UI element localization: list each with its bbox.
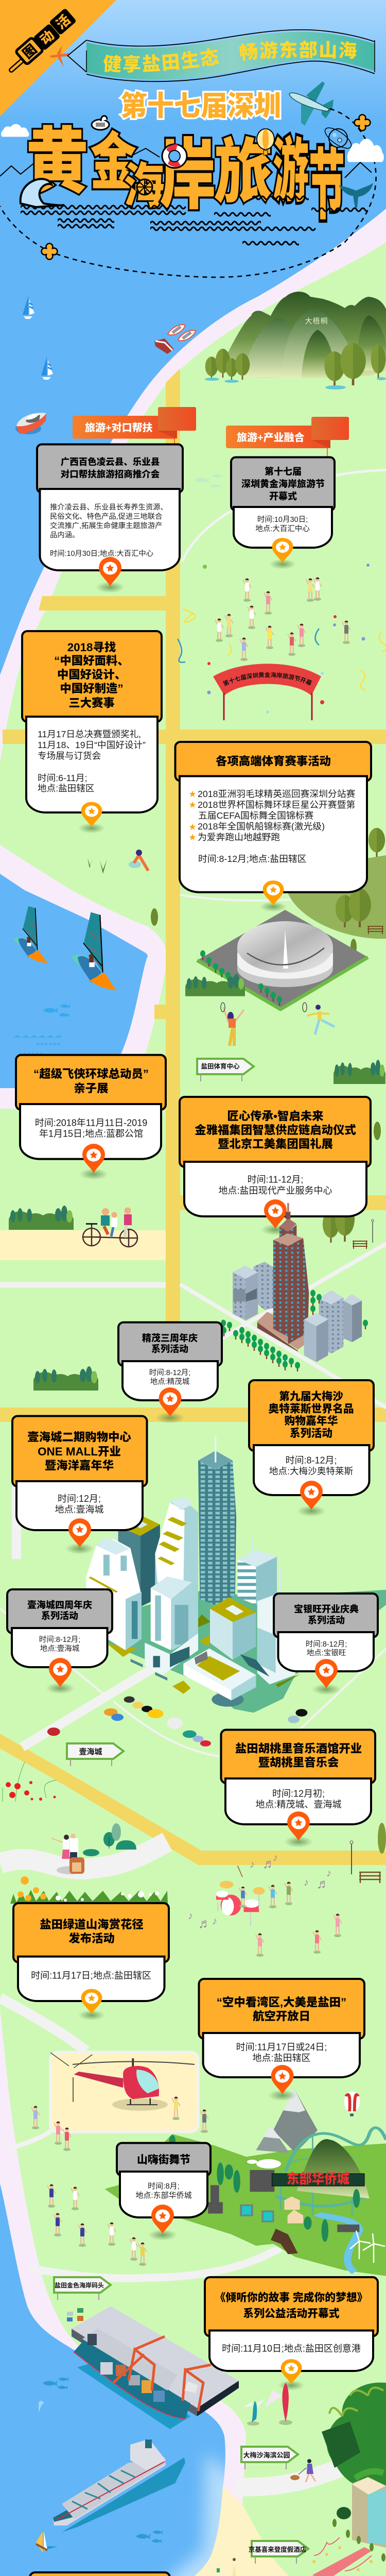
- card: 各项高端体育赛事活动: 时间:8-12月;地点:盐田辖区: [198, 854, 306, 864]
- statues: [243, 2383, 292, 2426]
- card: 2018寻找: 专场展与订货会: [38, 751, 101, 761]
- decorative mountains: [0, 148, 372, 178]
- grass strip with flowers: [10, 1876, 168, 1904]
- city ground shadow: [106, 1590, 386, 1713]
- card: 壹海城二期: 壹海城二期购物中心: [27, 1430, 131, 1444]
- hotel: [0, 2239, 386, 2548]
- card: 超级飞侠: 年1月15日;地点:蓝郡公馆: [39, 1128, 143, 1139]
- sign: 盐田体育中心: 盐田体育中心: [201, 1062, 240, 1070]
- card: 2018寻找: 2018寻找: [67, 641, 116, 654]
- illustration: title stamp: 动: [37, 27, 57, 48]
- card: 2018寻找: 地点:盐田辖区: [38, 783, 94, 793]
- fish shadow: [195, 474, 222, 488]
- sea ripples: [13, 1035, 63, 1055]
- confetti crowd: [215, 577, 350, 661]
- music notes: ♪: [212, 1916, 217, 1927]
- statue over pin: [283, 2383, 289, 2421]
- sign: 盐田体育中心: [197, 1059, 254, 1081]
- icon: teal airplane: [289, 81, 334, 126]
- sign: 盐田金色海岸码头: 盐田金色海岸码头: [55, 2281, 104, 2289]
- windsurfer left: [13, 906, 48, 963]
- illustration: mountains 大梧桐: 大梧桐: [305, 317, 328, 325]
- trees and bench by tower: [323, 1202, 374, 1249]
- card: 金色游船: [30, 2572, 170, 2576]
- music notes: ♪: [188, 1910, 193, 1922]
- illustration: theme park 东部华侨城: [104, 2089, 386, 2276]
- opening ceremony arch: 第十七届深圳黄金海岸旅游节开幕式: [223, 672, 312, 686]
- badminton man: [303, 1003, 335, 1035]
- card: 广西百色: [37, 444, 183, 593]
- music notes: [188, 1852, 331, 1931]
- card: 盐田绿道: 发布活动: [68, 1931, 115, 1945]
- card: 壹海城二期: 暨海洋嘉年华: [45, 1459, 114, 1472]
- card: 第九届大梅沙: 购物嘉年华: [285, 1415, 338, 1427]
- road vans: [130, 1659, 143, 1667]
- card: 各项高端体育赛事活动: 各项高端体育赛事活动: [216, 754, 331, 768]
- white paths: [0, 470, 386, 2487]
- grass tufts: [87, 858, 107, 874]
- bushes left: [9, 1206, 74, 1230]
- icon: ship wheel: [137, 179, 152, 195]
- card: 倾听你的故事: 时间:11月10日;地点:盐田区创意港: [222, 2343, 361, 2353]
- card: 第十七届开幕式: 深圳黄金海岸旅游节: [241, 478, 325, 489]
- music notes: ♪: [250, 1859, 255, 1870]
- icon: lamp: [350, 1841, 353, 1874]
- card: 倾听你的故事: 系列公益活动开幕式: [243, 2307, 340, 2319]
- bench and tree music area: [359, 1823, 386, 1883]
- trees on hill: [336, 828, 385, 927]
- illustration: title stamp: 活: [53, 12, 73, 32]
- illustration: stadium: [197, 910, 368, 1009]
- mid-rise: [210, 1608, 233, 1660]
- card: 壹海城四周年庆: [7, 1589, 112, 1694]
- palms: [322, 2382, 386, 2488]
- teal spiral tower: [198, 1461, 216, 1605]
- bushes lower: [33, 1366, 98, 1391]
- boats: [154, 325, 196, 354]
- card: 2018寻找: 三大赛事: [68, 696, 115, 709]
- card: 2018寻找: “中国好面料、: [54, 654, 129, 667]
- jellyfish: [39, 2401, 44, 2413]
- fish: [43, 1005, 71, 1017]
- card: 2018寻找: [22, 631, 162, 834]
- cloud right: [347, 139, 384, 162]
- card: 第十七届开幕式: 第十七届: [265, 466, 302, 477]
- family bike: [83, 1208, 137, 1247]
- card: 宝银旺开业庆典: 地点:宝银旺: [307, 1649, 346, 1657]
- card: 第十七届开幕式: 开幕式: [269, 490, 297, 502]
- music notes: ♪: [304, 1877, 309, 1888]
- confetti: [178, 564, 386, 714]
- card: 第九届大梅沙: 奥特莱斯世界名品: [268, 1402, 354, 1415]
- card: 2018寻找: 中国好制造”: [60, 682, 124, 695]
- illustration: office towers: [233, 1203, 362, 1362]
- tag: 旅游+产业融合: 旅游+产业融合: [237, 431, 305, 444]
- card: 匠心传承: 金雅福集团智慧供应链启动仪式: [195, 1123, 356, 1137]
- card: 各项高端体育赛事活动: ★: [189, 833, 196, 841]
- card: 匠心传承: 地点:盐田现代产业服务中心: [218, 1185, 332, 1196]
- helipad: [50, 2052, 198, 2132]
- grass plants: [151, 908, 381, 1140]
- heading: 黄金海岸旅游节: 黄: [26, 122, 89, 202]
- card: 2018寻找: 11月17日总决赛暨颁奖礼,: [38, 729, 141, 739]
- park trees cluster: [83, 1823, 136, 1856]
- card: 超级飞侠: 亲子展: [74, 1082, 109, 1095]
- tag: 旅游+对口帮扶: [73, 407, 196, 444]
- card: 倾听你的故事: [205, 2277, 378, 2391]
- card: 超级飞侠: [16, 1055, 166, 1180]
- card: 胡桃里音乐酒馆: 暨胡桃里音乐会: [258, 1756, 339, 1769]
- card: 广西百色: 民俗文化、特色产品,促进三地联合: [50, 512, 162, 521]
- flowers: [205, 377, 386, 389]
- sign: 壹海城: 壹海城: [79, 1747, 102, 1756]
- card: 壹海城四周年庆: 时间:8-12月;: [39, 1635, 80, 1644]
- card: 2018寻找: 时间:6-11月;: [38, 773, 87, 783]
- card: 宝银旺开业庆典: 系列活动: [308, 1615, 345, 1625]
- card: 山嗨街舞节: 山嗨街舞节: [137, 2154, 190, 2166]
- tag: 旅游+对口帮扶: 旅游+对口帮扶: [85, 421, 153, 434]
- sailboats: [23, 296, 53, 380]
- card: 2018寻找: 中国好设计、: [57, 668, 126, 681]
- fish near port: [43, 2377, 163, 2543]
- trees near mountain: [205, 343, 385, 386]
- sign: 盐田金色海岸码头: [54, 2277, 111, 2300]
- opening ceremony arch: [213, 664, 321, 720]
- top banner: [67, 29, 375, 82]
- grey right towers: [319, 1299, 331, 1353]
- card: 各项高端体育赛事活动: [175, 742, 371, 912]
- music notes: ♪: [273, 1852, 278, 1863]
- card: 空中看湾区 航空开放日: 时间:11月17日或24日;: [236, 2042, 327, 2053]
- black wave lines: [21, 196, 386, 245]
- card: 广西百色: 对口帮扶旅游招商推介会: [61, 469, 160, 479]
- card: 各项高端体育赛事活动: 为爱奔跑山地越野跑: [198, 832, 280, 842]
- card: 2018寻找: 11月18、19日“中国好设计”: [38, 740, 146, 750]
- tower shaft: [273, 1240, 288, 1336]
- sailboat white: [36, 2531, 58, 2553]
- seated woman: [129, 850, 148, 871]
- illustration: cargo ship: [53, 2439, 185, 2532]
- music notes: ♪: [326, 1868, 331, 1879]
- sign: 京基喜来登度假酒店: 京基喜来登度假酒店: [249, 2546, 306, 2553]
- heading: 黄金海岸旅游节: 游: [273, 132, 309, 210]
- low front building: [212, 1692, 244, 1707]
- heading: 黄金海岸旅游节: 岸: [160, 132, 216, 218]
- card: 胡桃里音乐酒馆: 时间:12月初;: [272, 1789, 325, 1799]
- icon: whale tail: [339, 183, 373, 208]
- foam highlight near beach: [165, 2452, 386, 2576]
- icon: seagull: [92, 116, 109, 130]
- grey left towers: [254, 1262, 276, 1310]
- icon: planet: [322, 124, 354, 152]
- badminton woman: [221, 1003, 244, 1046]
- card: 各项高端体育赛事活动: ★: [189, 801, 196, 809]
- dark teal building: [118, 1527, 141, 1607]
- card: 第九届大梅沙: 地点:大梅沙奥特莱斯: [269, 1466, 353, 1477]
- band and drums: [216, 1866, 342, 1957]
- card: 各项高端体育赛事活动: 2018年全国帆船锦标赛(激光级): [198, 821, 325, 832]
- card: 胡桃里音乐酒馆: 地点:精茂城、壹海城: [255, 1799, 342, 1809]
- music notes: ♬: [317, 1876, 330, 1891]
- icon: clover right: [354, 114, 371, 131]
- icon: ferry: [15, 413, 46, 434]
- heading: 第十七届深圳: 第十七届深圳: [120, 91, 281, 122]
- card: 广西百色: 时间:10月30日;地点:大百汇中心: [50, 549, 153, 558]
- card: 各项高端体育赛事活动: 2018世界杯国标舞环球巨星公开赛暨第: [198, 800, 355, 810]
- card: 广西百色: 广西百色凌云县、乐业县: [61, 456, 160, 467]
- card: 盐田绿道: 时间:11月17日;地点:盐田辖区: [31, 1970, 151, 1980]
- card: 匠心传承: 时间:11-12月;: [248, 1175, 303, 1185]
- card: 空中看湾区 航空开放日: “空中看湾区,大美是盐田”: [217, 1995, 346, 2009]
- icon: small orange plane: [49, 45, 69, 67]
- card: 壹海城四周年庆: 壹海城四周年庆: [27, 1599, 92, 1611]
- woman walking dog: [290, 2459, 315, 2482]
- crowd at helipad: [31, 2097, 208, 2151]
- stepped tower: [155, 1501, 198, 1650]
- bushes by stadium: [185, 974, 245, 996]
- music notes: ♬: [198, 1916, 212, 1931]
- card: 盐田绿道: [13, 1903, 169, 2021]
- illustration: helicopter on pad: [50, 2053, 195, 2111]
- street dancers: [47, 2184, 147, 2266]
- heading: 黄金海岸旅游节: 节: [309, 142, 345, 229]
- right tall building: [257, 1594, 301, 1684]
- card: 壹海城四周年庆: 系列活动: [41, 1611, 78, 1621]
- top banner: 健享盐田生态 畅游东部山海: [103, 40, 357, 73]
- card: 宝银旺开业庆典: 宝银旺开业庆典: [294, 1603, 359, 1615]
- card: 第十七届开幕式: 时间:10月30日;: [257, 515, 308, 524]
- beach props: [217, 2558, 308, 2576]
- card: 空中看湾区 航空开放日: 航空开放日: [253, 2009, 310, 2023]
- card: 壹海城四周年庆: 地点:壹海城: [40, 1645, 80, 1653]
- card: 壹海城二期: ONE MALL开业: [38, 1445, 121, 1458]
- card: 空中看湾区 航空开放日: [199, 1979, 364, 2101]
- sign: 大梅沙海滨公园: 大梅沙海滨公园: [243, 2451, 290, 2459]
- card: 空中看湾区 航空开放日: 地点:盐田辖区: [252, 2053, 311, 2063]
- icon: life buoy: [162, 144, 187, 168]
- heading: 黄金海岸旅游节: 海: [124, 158, 165, 214]
- card: 各项高端体育赛事活动: 五届CEFA国标舞全国锦标赛: [198, 810, 313, 821]
- illustration: city skyline: [86, 1437, 386, 1713]
- sign: 壹海城: [67, 1743, 124, 1766]
- sign: 大梅沙海滨公园: [241, 2447, 298, 2469]
- sky gradient: [0, 0, 386, 124]
- card: 精茂三周年庆: 精茂三周年庆: [142, 1332, 198, 1344]
- hotel plants: [332, 2507, 385, 2562]
- card: 第九届大梅沙: 系列活动: [290, 1427, 332, 1439]
- card: 壹海城二期: 地点:壹海城: [55, 1504, 104, 1515]
- illustration: container port: [67, 2306, 239, 2429]
- heading: 黄金海岸旅游节: [26, 122, 345, 229]
- yellow roads: [0, 368, 386, 1865]
- tag: 旅游+产业融合: [226, 417, 349, 457]
- card: 胡桃里音乐酒馆: [221, 1730, 375, 1848]
- card: 宝银旺开业庆典: 时间:8-12月;: [306, 1640, 347, 1649]
- card: 精茂三周年庆: 系列活动: [151, 1344, 188, 1354]
- sign: 京基喜来登度假酒店: [249, 2541, 308, 2564]
- tower base: [257, 1312, 304, 1350]
- sandy cycling lane: [0, 1230, 166, 1260]
- card: 各项高端体育赛事活动: ★: [189, 790, 196, 798]
- couple with map: [51, 1834, 84, 1874]
- card: 精茂三周年庆: 时间:8-12月;: [149, 1368, 190, 1377]
- cars: [47, 1696, 307, 1747]
- card: 各项高端体育赛事活动: ★: [189, 823, 196, 831]
- card: 第九届大梅沙: 第九届大梅沙: [279, 1390, 343, 1402]
- card: 第十七届开幕式: [231, 457, 335, 569]
- cloud left: [1, 124, 29, 137]
- card: 山嗨街舞节: 时间:8月;: [148, 2182, 180, 2191]
- card: 精茂三周年庆: 地点:精茂城: [150, 1378, 190, 1386]
- illustration: theme park 东部华侨城: 东部华侨城: [287, 2171, 349, 2187]
- card: 匠心传承: 暨北京工美集团国礼展: [218, 1137, 333, 1150]
- card: 第九届大梅沙: 时间:8-12月;: [285, 1455, 337, 1465]
- card: 第九届大梅沙: [249, 1380, 374, 1517]
- card: 宝银旺开业庆典: [274, 1594, 378, 1695]
- card: 广西百色: 交流推广,拓展生命健康主题旅游产: [50, 521, 162, 530]
- card: 广西百色: 品内涵。: [50, 531, 79, 539]
- windsurfer right: [71, 912, 116, 991]
- card: 山嗨街舞节: 地点:东部华侨城: [135, 2191, 192, 2200]
- card: 各项高端体育赛事活动: 2018亚洲羽毛球精英巡回赛深圳分站赛: [198, 789, 355, 799]
- icon: hot air balloon: [257, 129, 274, 155]
- illustration: mountains 大梧桐: [226, 292, 386, 378]
- card: 超级飞侠: “超级飞侠环球总动员”: [33, 1067, 149, 1080]
- red carpet: [312, 2537, 373, 2576]
- sand beach: [189, 2486, 386, 2576]
- music notes: ♬: [262, 1856, 276, 1871]
- striped tower: [238, 1560, 256, 1605]
- icon: wave curl: [21, 179, 64, 207]
- front tower: [151, 1588, 171, 1650]
- heading: 黄金海岸旅游节: 旅: [214, 132, 273, 211]
- card: 第十七届开幕式: 地点:大百汇中心: [255, 524, 310, 533]
- card: 超级飞侠: 时间:2018年11月11日-2019: [35, 1118, 147, 1128]
- card: 精茂三周年庆: [118, 1323, 222, 1423]
- white tall tower: [86, 1539, 142, 1650]
- illustration: title stamp: 图: [20, 41, 40, 62]
- card: 匠心传承: 匠心传承•智启未来: [227, 1109, 323, 1123]
- icon: clover left: [41, 243, 58, 260]
- card: 匠心传承: [180, 1097, 371, 1235]
- green tree rows: [221, 1290, 368, 1371]
- heading: 黄金海岸旅游节: 金: [90, 128, 136, 197]
- card: 胡桃里音乐酒馆: 盐田胡桃里音乐酒馆开业: [235, 1741, 362, 1755]
- hill with trees: [287, 855, 386, 939]
- bench: [367, 926, 383, 934]
- bushes right: [334, 1060, 385, 1084]
- card: 山嗨街舞节: [117, 2143, 210, 2241]
- card: 广西百色: 推介凌云县、乐业县长寿养生资源、: [50, 503, 168, 512]
- illustration: title stamp: [0, 0, 116, 116]
- card: 盐田绿道: 盐田绿道山海赏花径: [40, 1918, 144, 1931]
- red flowers: [3, 1762, 57, 1802]
- dashed flight route: [0, 109, 376, 277]
- card: 倾听你的故事: 《倾听你的故事 完成你的梦想》: [215, 2292, 367, 2304]
- card: 壹海城二期: 时间:12月;: [58, 1494, 101, 1504]
- card: 壹海城二期: [12, 1416, 147, 1554]
